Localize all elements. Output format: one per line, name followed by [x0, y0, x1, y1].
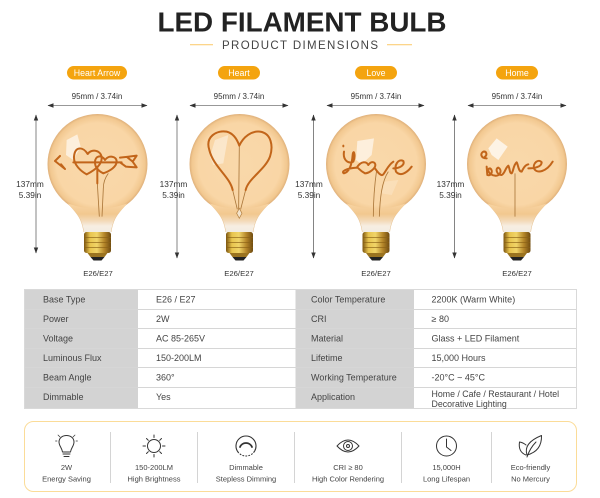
width dimension: [48, 92, 147, 106]
bulb: [326, 114, 426, 260]
right table values: 15,000 Hours: [432, 353, 486, 363]
height dimension: 137mm: [437, 179, 464, 189]
height dimension: 137mm: [160, 179, 187, 189]
left table values: [156, 294, 205, 402]
width dimension: 95mm / 3.74in: [214, 92, 264, 101]
height dimension: 5.39in: [162, 190, 185, 200]
width dimension: [327, 92, 424, 106]
left table values: AC 85-265V: [156, 334, 205, 344]
left table labels: Dimmable: [43, 392, 84, 402]
right table labels: [311, 294, 397, 402]
feature: color rendering: High Color Rendering: [312, 474, 384, 484]
left table labels: Power: [43, 314, 69, 324]
feature: dimmable: Stepless Dimming: [216, 474, 276, 484]
base label: E26/E27: [361, 269, 391, 278]
icon: eye: [337, 440, 359, 452]
bulb: [48, 114, 148, 260]
label pill: Heart Arrow: [74, 68, 121, 78]
feature: color rendering: [312, 440, 384, 484]
left table values: 360°: [156, 372, 175, 382]
specification table: [24, 290, 577, 409]
right table labels: CRI: [311, 314, 326, 324]
icon: light bulb: [56, 435, 78, 456]
right table labels: Application: [311, 392, 355, 402]
feature: eco-friendly: No Mercury: [511, 474, 550, 484]
height dimension: [16, 115, 44, 253]
feature: lifespan: [423, 436, 470, 484]
right table labels: Lifetime: [311, 353, 343, 363]
label pill: Home: [505, 68, 529, 78]
feature: high brightness: [128, 435, 181, 484]
product: love: [295, 66, 426, 278]
base label: E26/E27: [224, 269, 254, 278]
bulb: [190, 114, 290, 260]
left table values: 2W: [156, 314, 170, 324]
width dimension: [190, 92, 288, 106]
height dimension: [437, 115, 464, 258]
right table labels: Working Temperature: [311, 372, 397, 382]
feature: dimmable: [216, 436, 276, 484]
left table values: Yes: [156, 392, 171, 402]
feature: lifespan: 15,000H: [432, 463, 461, 472]
left table values: E26 / E27: [156, 294, 196, 304]
height dimension: 5.39in: [19, 190, 42, 200]
label pill: [355, 66, 397, 80]
feature: high brightness: 150-200LM: [135, 463, 173, 472]
left table labels: Voltage: [43, 334, 73, 344]
left table labels: [43, 294, 102, 402]
right table values: [432, 294, 559, 409]
feature: eco-friendly: Eco-friendly: [511, 463, 551, 472]
bulb: [467, 114, 567, 260]
features panel: [24, 422, 576, 492]
right table values: ≥ 80: [432, 314, 449, 324]
feature: lifespan: Long Lifespan: [423, 474, 470, 484]
height dimension: [160, 115, 187, 258]
width dimension: 95mm / 3.74in: [492, 92, 542, 101]
product: home: [437, 66, 567, 278]
left table labels: Beam Angle: [43, 372, 92, 382]
right table values: 2200K (Warm White): [432, 294, 515, 304]
icon: clock: [436, 436, 456, 456]
left table labels: Base Type: [43, 294, 85, 304]
label pill: [218, 66, 260, 80]
right table values: Decorative Lighting: [432, 399, 507, 409]
left table labels: Luminous Flux: [43, 353, 102, 363]
height dimension: 5.39in: [439, 190, 462, 200]
height dimension: 5.39in: [298, 190, 321, 200]
feature: high brightness: High Brightness: [128, 474, 181, 484]
right table labels: Color Temperature: [311, 294, 385, 304]
icon: leaves: [519, 436, 542, 457]
product: heart arrow: [16, 66, 148, 278]
feature: energy saving: Energy Saving: [42, 474, 91, 484]
feature: eco-friendly: [511, 436, 551, 484]
right table labels: Material: [311, 334, 343, 344]
width dimension: 95mm / 3.74in: [72, 92, 122, 101]
label pill: Heart: [228, 68, 250, 78]
feature: color rendering: CRI ≥ 80: [333, 463, 363, 472]
feature: dimmable: Dimmable: [229, 463, 263, 472]
feature: energy saving: [42, 435, 91, 484]
subtitle: PRODUCT DIMENSIONS: [222, 40, 378, 52]
base label: E26/E27: [502, 269, 532, 278]
left table values: 150-200LM: [156, 353, 202, 363]
label pill: [67, 66, 127, 80]
icon: dimmer dial: [236, 436, 256, 456]
height dimension: 137mm: [295, 179, 323, 189]
right table values: -20°C ~ 45°C: [432, 372, 485, 382]
icon: sun: [143, 435, 165, 457]
width dimension: 95mm / 3.74in: [351, 92, 401, 101]
title: LED FILAMENT BULB: [158, 6, 446, 38]
right table values: Home / Cafe / Restaurant / Hotel: [432, 389, 559, 399]
base label: E26/E27: [83, 269, 113, 278]
label pill: [496, 66, 538, 80]
height dimension: [295, 115, 323, 258]
label pill: Love: [366, 68, 386, 78]
width dimension: [468, 92, 566, 106]
right table values: Glass + LED Filament: [432, 334, 520, 344]
height dimension: 137mm: [16, 179, 44, 189]
feature: energy saving: 2W: [61, 463, 73, 472]
product: heart: [160, 66, 290, 278]
